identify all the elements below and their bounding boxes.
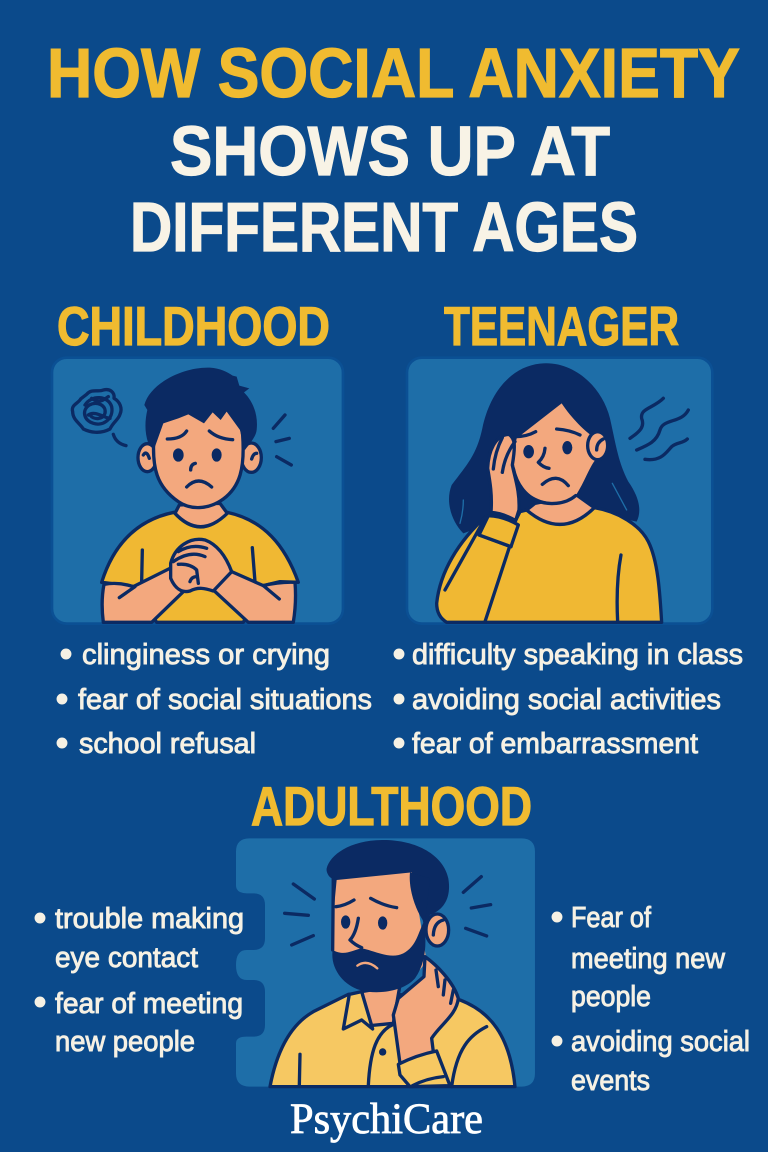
adulthood left bullet list: [35, 903, 244, 1058]
adulthood right bullet list: meeting new: [571, 943, 726, 975]
heading: teenager: TEENAGER: [444, 295, 679, 357]
title: DIFFERENT AGES: [130, 188, 638, 266]
adulthood left bullet list: eye contact: [55, 942, 198, 974]
teenager bullet list: difficulty speaking in class: [412, 639, 743, 671]
panel: childhood illustration: [53, 359, 342, 622]
childhood bullet list: fear of social situations: [78, 684, 372, 716]
man figure: [270, 840, 515, 1087]
boy figure: [102, 368, 298, 622]
adulthood right bullet list: people: [571, 981, 651, 1013]
adulthood left bullet list: fear of meeting: [55, 988, 243, 1020]
adulthood right bullet list: [552, 902, 750, 1097]
heading: adulthood: ADULTHOOD: [251, 775, 532, 837]
icon: scribble thought: [72, 390, 126, 446]
adulthood right bullet list: Fear of: [571, 902, 652, 934]
teenager bullet list: [394, 639, 743, 760]
panel: adulthood illustration: [236, 838, 535, 1087]
icon: stress lines: [273, 415, 291, 465]
panel: teenager illustration: [408, 359, 711, 622]
icon: stress lines: [285, 877, 491, 945]
adulthood left bullet list: trouble making: [55, 903, 244, 935]
teen figure: [437, 363, 662, 622]
heading: childhood: CHILDHOOD: [57, 295, 330, 357]
childhood bullet list: clinginess or crying: [82, 639, 330, 671]
childhood bullet list: [57, 639, 372, 760]
title: [47, 34, 740, 266]
icon: wavy stress lines: [630, 398, 688, 460]
adulthood right bullet list: avoiding social: [571, 1026, 750, 1058]
adulthood right bullet list: events: [571, 1065, 650, 1097]
teenager bullet list: avoiding social activities: [412, 684, 721, 716]
logo: PsychiCare: PsychiCare: [290, 1096, 483, 1143]
adulthood left bullet list: new people: [55, 1026, 195, 1058]
teenager bullet list: fear of embarrassment: [412, 728, 698, 760]
title: SHOWS UP AT: [170, 112, 610, 190]
childhood bullet list: school refusal: [79, 728, 256, 760]
